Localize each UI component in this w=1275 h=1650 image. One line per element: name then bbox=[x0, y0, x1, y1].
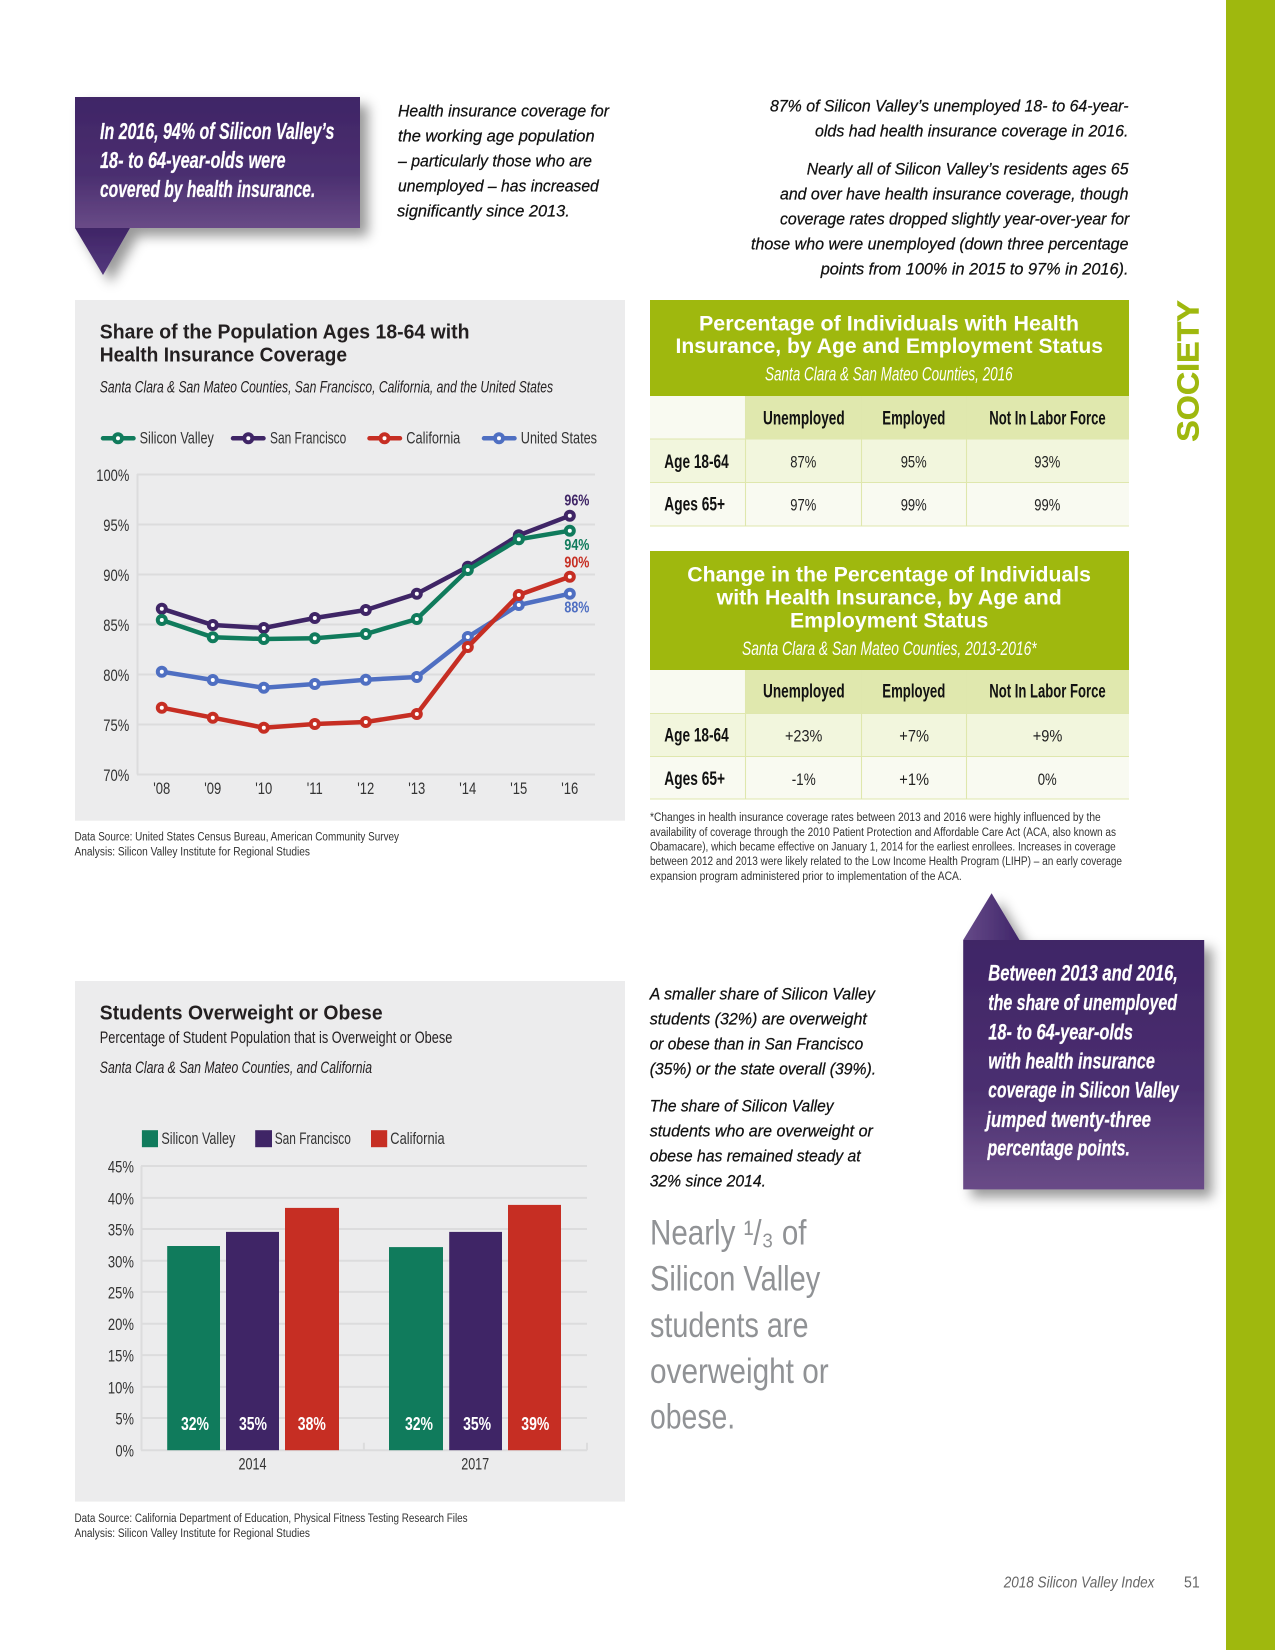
row: Age 18-64: +7% bbox=[899, 728, 929, 746]
callout: unemployed coverage jump: jumped twenty-three bbox=[984, 1107, 1151, 1132]
column headers bbox=[763, 408, 1106, 429]
footnote bbox=[650, 812, 1122, 883]
pull quote: nearly one third: Silicon Valley bbox=[650, 1260, 821, 1299]
text block: student share: obese has remained steady at bbox=[650, 1146, 862, 1165]
y axis labels: 100% bbox=[96, 467, 130, 485]
column headers: Not In Labor Force bbox=[989, 408, 1106, 429]
callout: unemployed coverage jump: with health insurance bbox=[988, 1049, 1155, 1074]
callout: unemployed coverage jump bbox=[963, 893, 1204, 1189]
panel: students overweight bar chart bbox=[75, 981, 625, 1502]
data source: line chart: Data Source: United States Census Bureau, American Community Survey bbox=[74, 832, 399, 844]
text block: unemployed and seniors coverage: points from 100% in 2015 to 97% in 2016). bbox=[820, 259, 1128, 278]
text block: student share: The share of Silicon Valley bbox=[650, 1096, 835, 1115]
x axis labels: '12 bbox=[357, 780, 374, 798]
pull quote: nearly one third: Nearly ¹/₃ of bbox=[650, 1213, 807, 1252]
row: Ages 65+: 99% bbox=[1034, 497, 1061, 515]
y axis labels: 0% bbox=[116, 1443, 134, 1461]
table title: Change in the Percentage of Individuals bbox=[687, 564, 1091, 587]
x axis labels: '10 bbox=[255, 780, 272, 798]
row: Age 18-64 bbox=[664, 726, 1063, 747]
legend: California bbox=[390, 1129, 445, 1148]
legend bbox=[142, 1129, 445, 1148]
row: Age 18-64: 95% bbox=[901, 454, 927, 472]
table title: Santa Clara & San Mateo Counties, 2016 bbox=[765, 365, 1013, 386]
callout: unemployed coverage jump: coverage in Silicon Valley bbox=[988, 1078, 1180, 1103]
footer: page number: 51 bbox=[1184, 1574, 1200, 1591]
bars: 2017: 39% bbox=[521, 1414, 549, 1434]
pull quote: nearly one third: students are bbox=[650, 1306, 808, 1345]
chart subtitle: Percentage of Student Population that is Overweight or Obese bbox=[100, 1028, 452, 1047]
panel: health insurance line chart bbox=[75, 300, 625, 821]
bars: 2014: 38% bbox=[298, 1414, 326, 1434]
legend: San Francisco bbox=[270, 429, 346, 448]
y axis labels: 25% bbox=[108, 1284, 134, 1302]
y axis labels: 15% bbox=[108, 1348, 134, 1366]
bar chart bbox=[108, 1159, 587, 1473]
series: California bbox=[158, 573, 574, 732]
y axis labels: 45% bbox=[108, 1159, 134, 1177]
column headers: Employed bbox=[882, 408, 945, 429]
x axis labels: '08 bbox=[153, 780, 170, 798]
text block: unemployed and seniors coverage: Nearly all of Silicon Valley’s residents ages 65 bbox=[807, 159, 1129, 178]
y axis labels: 40% bbox=[108, 1190, 134, 1208]
row: Ages 65+: 99% bbox=[901, 497, 927, 515]
chart subtitle: Santa Clara & San Mateo Counties, San Francisco, California, and the United States bbox=[100, 378, 553, 397]
x axis labels: 2014 bbox=[238, 1455, 266, 1473]
bars: 2017 bbox=[389, 1205, 561, 1450]
column headers bbox=[763, 682, 1106, 703]
row: Ages 65+: -1% bbox=[792, 771, 816, 789]
text block: student share: students (32%) are overweight bbox=[650, 1009, 868, 1028]
row: Age 18-64: Age 18-64 bbox=[664, 452, 729, 473]
pull quote: nearly one third: overweight or bbox=[650, 1352, 829, 1391]
legend: Silicon Valley bbox=[161, 1129, 236, 1148]
data source: bar chart: Data Source: California Department of Education, Physical Fitness Testing Research Files bbox=[74, 1513, 468, 1525]
legend: Silicon Valley bbox=[140, 429, 214, 448]
y axis labels bbox=[96, 467, 130, 785]
callout: 94% covered bbox=[75, 97, 360, 275]
table: coverage by age and employment bbox=[650, 300, 1129, 526]
x axis labels: '16 bbox=[561, 780, 578, 798]
column headers: Not In Labor Force bbox=[989, 682, 1106, 703]
y axis labels bbox=[108, 1159, 134, 1461]
table title: Percentage of Individuals with Health bbox=[699, 313, 1079, 336]
series: San Francisco bbox=[158, 512, 574, 632]
row: Age 18-64: 93% bbox=[1034, 454, 1061, 472]
text block: working age coverage bbox=[397, 102, 610, 221]
line chart bbox=[96, 467, 595, 798]
text block: working age coverage: unemployed – has increased bbox=[398, 177, 599, 196]
end value labels bbox=[564, 493, 590, 617]
footnote: *Changes in health insurance coverage rates between 2013 and 2016 were highly influenced by the bbox=[650, 812, 1101, 824]
chart title bbox=[100, 321, 470, 366]
legend: California bbox=[406, 429, 461, 448]
x axis labels: '14 bbox=[459, 780, 476, 798]
side band bbox=[1226, 0, 1275, 1650]
text block: unemployed and seniors coverage bbox=[751, 97, 1131, 278]
x axis labels bbox=[153, 780, 578, 798]
footnote: availability of coverage through the 2010 Patient Protection and Affordable Care Act (ACA, also known as bbox=[650, 827, 1116, 839]
y axis labels: 30% bbox=[108, 1253, 134, 1271]
row: Age 18-64: 87% bbox=[790, 454, 817, 472]
data source: line chart bbox=[74, 832, 399, 859]
row: Age 18-64: +23% bbox=[785, 728, 823, 746]
y axis labels: 75% bbox=[103, 717, 130, 735]
text block: student share: (35%) or the state overall (39%). bbox=[650, 1060, 876, 1078]
table title bbox=[676, 313, 1103, 386]
end value labels: 90% bbox=[564, 555, 590, 572]
end value labels: 94% bbox=[564, 537, 590, 554]
end value labels: 96% bbox=[564, 493, 590, 510]
table title bbox=[687, 564, 1091, 660]
text block: unemployed and seniors coverage: coverage rates dropped slightly year-over-year for bbox=[780, 209, 1131, 228]
legend: San Francisco bbox=[275, 1129, 351, 1148]
y axis labels: 10% bbox=[108, 1379, 134, 1397]
text block: working age coverage: Health insurance coverage for bbox=[398, 102, 610, 121]
bars: 2014: 32% bbox=[181, 1414, 209, 1434]
table title: with Health Insurance, by Age and bbox=[716, 586, 1062, 609]
chart title: Share of the Population Ages 18-64 with bbox=[100, 321, 470, 343]
text block: unemployed and seniors coverage: olds had health insurance coverage in 2016. bbox=[815, 122, 1128, 141]
callout: 94% covered: covered by health insurance. bbox=[100, 176, 315, 202]
text block: working age coverage: significantly since 2013. bbox=[397, 202, 570, 221]
y axis labels: 85% bbox=[103, 617, 130, 635]
y axis labels: 80% bbox=[103, 667, 130, 685]
row: Age 18-64: +9% bbox=[1033, 728, 1063, 746]
text block: student share: or obese than in San Francisco bbox=[650, 1034, 863, 1053]
y axis labels: 95% bbox=[103, 517, 130, 535]
y axis labels: 5% bbox=[116, 1410, 134, 1428]
legend bbox=[103, 429, 597, 448]
pull quote: nearly one third bbox=[650, 1213, 829, 1437]
data source: line chart: Analysis: Silicon Valley Institute for Regional Studies bbox=[74, 847, 310, 859]
text block: student share: students who are overweight or bbox=[650, 1121, 874, 1140]
bars: 2017: 32% bbox=[405, 1414, 433, 1434]
x axis labels: 2017 bbox=[461, 1455, 489, 1473]
end value labels: 88% bbox=[564, 600, 590, 617]
y axis labels: 20% bbox=[108, 1316, 134, 1334]
x axis labels: '11 bbox=[307, 780, 323, 798]
column headers: Unemployed bbox=[763, 682, 845, 703]
chart title: Health Insurance Coverage bbox=[100, 344, 347, 366]
x axis labels: '15 bbox=[510, 780, 527, 798]
callout: unemployed coverage jump: 18- to 64-year-olds bbox=[988, 1020, 1133, 1045]
callout: unemployed coverage jump: Between 2013 and 2016, bbox=[988, 961, 1178, 986]
y axis labels: 70% bbox=[103, 767, 130, 785]
footnote: between 2012 and 2013 were likely related to the Low Income Health Program (LIHP) – an early coverage bbox=[650, 856, 1122, 868]
column headers: Unemployed bbox=[763, 408, 845, 429]
row: Ages 65+: Ages 65+ bbox=[664, 495, 725, 516]
row: Age 18-64 bbox=[664, 452, 1061, 473]
row: Age 18-64: Age 18-64 bbox=[664, 726, 729, 747]
y axis labels: 90% bbox=[103, 567, 130, 585]
text block: unemployed and seniors coverage: and over have health insurance coverage, though bbox=[780, 184, 1128, 203]
data source: bar chart: Analysis: Silicon Valley Institute for Regional Studies bbox=[74, 1528, 310, 1540]
row: Ages 65+: 0% bbox=[1038, 771, 1057, 789]
bars: 2014: 35% bbox=[239, 1414, 267, 1434]
text block: student share: 32% since 2014. bbox=[650, 1172, 766, 1190]
row: Ages 65+: Ages 65+ bbox=[664, 769, 725, 790]
callout: 94% covered: 18- to 64-year-olds were bbox=[100, 147, 286, 173]
bars: 2017: 35% bbox=[463, 1414, 491, 1434]
text block: unemployed and seniors coverage: those who were unemployed (down three percentage bbox=[751, 234, 1128, 253]
pull quote: nearly one third: obese. bbox=[650, 1398, 735, 1437]
callout: 94% covered: In 2016, 94% of Silicon Valley’s bbox=[100, 118, 334, 144]
footnote: expansion program administered prior to implementation of the ACA. bbox=[650, 871, 962, 883]
column headers: Employed bbox=[882, 682, 945, 703]
text block: student share: A smaller share of Silicon Valley bbox=[649, 984, 876, 1003]
text block: unemployed and seniors coverage: 87% of Silicon Valley’s unemployed 18- to 64-year- bbox=[770, 97, 1129, 116]
series: Silicon Valley bbox=[158, 527, 574, 643]
x axis labels: '13 bbox=[408, 780, 425, 798]
series: United States bbox=[158, 590, 574, 692]
text block: working age coverage: the working age population bbox=[398, 127, 595, 146]
callout: unemployed coverage jump: the share of unemployed bbox=[988, 990, 1177, 1015]
x axis labels bbox=[238, 1455, 489, 1473]
bars: 2014 bbox=[167, 1208, 339, 1450]
chart title: Students Overweight or Obese bbox=[100, 1003, 383, 1025]
footnote: Obamacare), which became effective on January 1, 2014 for the earliest enrollees. Increases in coverage bbox=[650, 842, 1116, 854]
text block: student share bbox=[649, 984, 876, 1190]
y axis labels: 35% bbox=[108, 1222, 134, 1240]
legend: United States bbox=[521, 429, 597, 448]
table: change in coverage bbox=[650, 551, 1129, 800]
data source: bar chart bbox=[74, 1513, 468, 1540]
row: Ages 65+: 97% bbox=[790, 497, 817, 515]
table title: Insurance, by Age and Employment Status bbox=[676, 335, 1103, 358]
row: Ages 65+: +1% bbox=[899, 771, 929, 789]
table title: Employment Status bbox=[790, 610, 988, 633]
table title: Santa Clara & San Mateo Counties, 2013-2016* bbox=[742, 639, 1037, 660]
footer: publication name: 2018 Silicon Valley Index bbox=[1003, 1574, 1155, 1591]
row: Ages 65+ bbox=[664, 495, 1061, 516]
row: Ages 65+ bbox=[664, 769, 1057, 790]
text block: working age coverage: – particularly those who are bbox=[397, 152, 592, 171]
chart geography note: Santa Clara & San Mateo Counties, and California bbox=[100, 1058, 372, 1077]
section label: society: SOCIETY bbox=[1170, 300, 1206, 442]
callout: unemployed coverage jump: percentage points. bbox=[987, 1136, 1130, 1160]
x axis labels: '09 bbox=[204, 780, 221, 798]
